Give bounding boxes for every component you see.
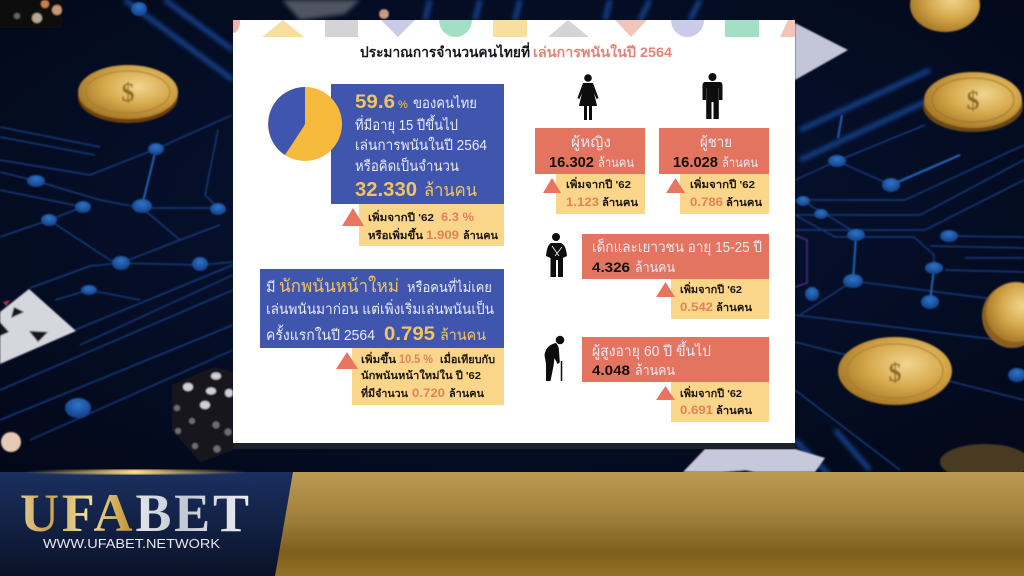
callout: youth increase: 0.542 (680, 300, 713, 314)
callout: elderly increase: 0.691 (680, 403, 713, 417)
panel: overall gambling share: ล้านคน (424, 180, 477, 200)
blurred blue streaks at top (125, 0, 940, 476)
callout: overall increase: หรือเพิ่มขึ้น (368, 227, 424, 242)
panel: youth: 4.326 (592, 259, 630, 275)
panel: overall gambling share (331, 84, 504, 204)
panel: new gamblers: หรือคนที่ไม่เคย (407, 278, 492, 295)
card bottom right (683, 449, 825, 472)
circuit lines (0, 115, 1024, 470)
panel: new gamblers (260, 269, 504, 348)
panel: youth (582, 234, 769, 279)
icon: woman (578, 74, 598, 120)
callout: youth increase: ล้านคน (716, 301, 753, 314)
panel: overall gambling share: 32.330 (355, 179, 417, 201)
pie chart: 59.6% (268, 87, 342, 161)
panel: men: ผู้ชาย (700, 134, 732, 151)
dice left (172, 367, 233, 462)
panel: new gamblers: เล่นพนันมาก่อน แต่เพิ่งเริ่มเล่นพนันเป็น (266, 299, 494, 318)
callout: overall increase: 1.909 (426, 228, 459, 242)
panel: youth: ล้านคน (635, 259, 675, 275)
gold coins (78, 0, 1024, 480)
gold glow line (20, 470, 250, 474)
panel: overall gambling share: ที่มีอายุ 15 ปีขึ้นไป (355, 114, 458, 134)
icon: youth with backpack (546, 233, 567, 277)
panel: new gamblers: มี (266, 279, 276, 296)
callout: elderly increase: ล้านคน (716, 404, 753, 417)
panel: women: ล้านคน (598, 155, 634, 170)
callout: new gamblers increase: นักพนันหน้าใหม่ใน ปี '62 (361, 368, 481, 382)
callout: elderly increase (656, 382, 769, 422)
callout: new gamblers increase: เมื่อเทียบกับ (440, 351, 495, 366)
callout: new gamblers increase: 0.720 (412, 386, 445, 400)
decorative top shapes row (233, 20, 795, 37)
panel: women: 16.302 (549, 155, 594, 171)
chip bottom left (1, 432, 21, 452)
panel: elderly: ผู้สูงอายุ 60 ปี ขึ้นไป (592, 340, 711, 360)
panel: elderly (582, 337, 769, 382)
brighter circuit connections (142, 115, 960, 302)
card top behind panel (282, 0, 360, 20)
callout: women increase: ล้านคน (602, 196, 639, 209)
panel: new gamblers: นักพนันหน้าใหม่ (279, 275, 399, 296)
callout: new gamblers increase: ล้านคน (449, 387, 485, 400)
chip top (379, 9, 389, 19)
title (360, 42, 672, 60)
gold coins: $ (966, 86, 980, 115)
website address: WWW.UFABET.NETWORK (43, 536, 220, 551)
callout: women increase: เพิ่มจากปี '62 (566, 176, 631, 191)
panel: elderly: 4.048 (592, 362, 630, 378)
callout: youth increase: เพิ่มจากปี '62 (680, 281, 742, 296)
callout: youth increase (656, 279, 769, 319)
bottom banner (0, 470, 1024, 576)
logo: UFABET: UFABET (20, 483, 249, 543)
icon: elderly person with cane (544, 336, 564, 381)
icon: man (702, 73, 722, 119)
callout: women increase (543, 174, 645, 214)
callout: men increase: เพิ่มจากปี '62 (690, 176, 755, 191)
playing card left (0, 289, 76, 364)
panel: new gamblers: 0.795 (384, 324, 435, 345)
panel: new gamblers: ล้านคน (440, 327, 486, 344)
callout: new gamblers increase (336, 348, 504, 405)
panel: men: ล้านคน (722, 155, 758, 170)
gold coins: $ (888, 358, 902, 387)
panel: women (535, 128, 645, 174)
callout: overall increase (342, 204, 504, 246)
panel: elderly: ล้านคน (635, 362, 675, 378)
callout: men increase: ล้านคน (726, 196, 763, 209)
callout: new gamblers increase: เพิ่มขึ้น (361, 351, 397, 366)
panel: men: 16.028 (673, 155, 718, 171)
callout: men increase: 0.786 (690, 195, 723, 209)
card top right (795, 23, 848, 80)
dice top left (0, 0, 62, 28)
circuit nodes (27, 2, 1024, 418)
title: เล่นการพนันในปี 2564 (533, 43, 672, 60)
gold coins: $ (122, 78, 134, 107)
callout: new gamblers increase: ที่มีจำนวน (361, 385, 409, 400)
callout: men increase (666, 174, 769, 214)
panel: overall gambling share: เล่นการพนันในปี 2564 (355, 136, 487, 154)
callout: overall increase: เพิ่มจากปี '62 (368, 209, 434, 224)
callout: new gamblers increase: 10.5 % (399, 352, 433, 366)
panel: men (659, 128, 769, 174)
panel: new gamblers: ครั้งแรกในปี 2564 (266, 324, 375, 344)
callout: overall increase: 6.3 % (441, 210, 474, 224)
title: ประมาณการจำนวนคนไทยที่ (360, 42, 530, 60)
panel: women: ผู้หญิง (571, 134, 611, 151)
panel: white infographic sheet (233, 20, 795, 449)
panel: youth: เด็กและเยาวชน อายุ 15-25 ปี (592, 237, 762, 256)
callout: overall increase: ล้านคน (463, 229, 499, 242)
panel: overall gambling share: หรือคิดเป็นจำนวน (355, 156, 459, 175)
panel: overall gambling share: 59.6 (355, 92, 395, 113)
panel: overall gambling share: % (398, 99, 408, 111)
callout: women increase: 1.123 (566, 195, 599, 209)
callout: elderly increase: เพิ่มจากปี '62 (680, 385, 742, 400)
panel: overall gambling share: ของคนไทย (413, 94, 477, 112)
